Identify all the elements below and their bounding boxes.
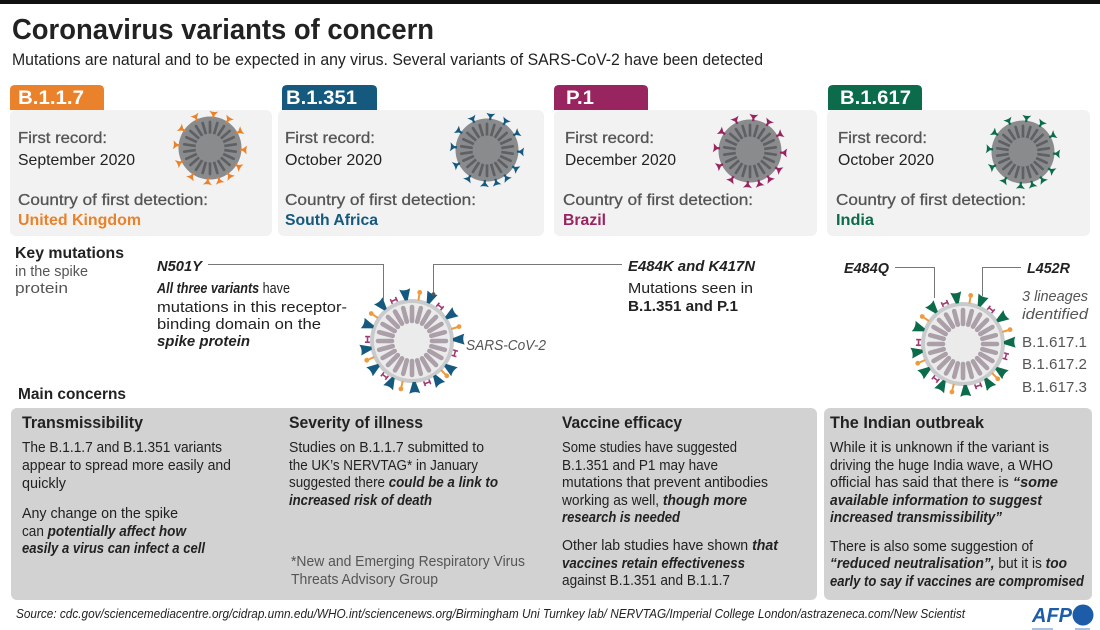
panel: B.1.351: South Africa	[285, 212, 378, 229]
panel: B.1.1.7: United Kingdom	[18, 212, 141, 229]
panel: B.1.351: October 2020	[285, 152, 382, 169]
panel: B.1.617: Country of first detection:	[836, 192, 1026, 209]
panel: P.1: P.1	[566, 88, 594, 109]
text block: transmissibility: Any change on the spike	[22, 505, 178, 522]
callout: E484K and K417N: Mutations seen in	[628, 280, 753, 297]
callout: N501Y: spike protein	[157, 333, 250, 350]
panel: B.1.617	[827, 85, 1090, 236]
AFP logo	[1031, 604, 1094, 630]
panel: B.1.1.7: B.1.1.7	[18, 88, 84, 109]
panel: main concerns background	[11, 408, 817, 600]
panel: B.1.1.7: Country of first detection:	[18, 192, 208, 209]
callout: E484K and K417N	[628, 258, 756, 315]
text block: vaccine efficacy	[561, 414, 779, 589]
panel: B.1.1.7: September 2020	[18, 152, 135, 169]
panel: B.1.351	[278, 85, 544, 236]
text block: vaccine efficacy: mutations that prevent antibodies	[562, 474, 768, 491]
panel: the Indian outbreak: increased transmissibility”	[830, 509, 1002, 526]
text block: transmissibility	[22, 414, 231, 557]
text block: severity of illness: increased risk of death	[289, 492, 432, 509]
callout: N501Y: binding domain on the	[157, 316, 321, 333]
panel: the Indian outbreak: “reduced neutralisation”, but it is too	[830, 555, 1067, 572]
text block: vaccine efficacy: working as well, though more	[561, 492, 747, 509]
text block: vaccine efficacy: research is needed	[562, 509, 681, 526]
panel: B.1.617: B.1.617	[840, 88, 911, 109]
panel: B.1.617: First record:	[838, 130, 927, 147]
text block: transmissibility: quickly	[22, 475, 66, 492]
India virus diagram with E484Q and L452R: L452R	[1027, 260, 1070, 277]
panel: B.1.351: B.1.351	[286, 88, 357, 109]
text block: vaccine efficacy: Some studies have suggested	[562, 439, 737, 456]
panel: B.1.1.7	[10, 85, 272, 236]
callout: N501Y: mutations in this receptor-	[157, 299, 347, 316]
panel: the Indian outbreak: There is also some suggestion of	[830, 538, 1034, 555]
key mutations heading: Key mutations	[15, 245, 124, 262]
text block: transmissibility: easily a virus can infect a cell	[22, 540, 206, 557]
panel: P.1: Country of first detection:	[563, 192, 753, 209]
panel: B.1.617: October 2020	[838, 152, 934, 169]
text block: vaccine efficacy: vaccines retain effectiveness	[562, 555, 745, 572]
text block: severity of illness	[289, 414, 525, 588]
subtitle: Mutations are natural and to be expected in any virus. Several variants of SARS-CoV-2 have been detected	[12, 50, 763, 69]
icon: green virus	[986, 115, 1060, 189]
top black bar	[0, 0, 1100, 4]
text block: transmissibility: appear to spread more easily and	[22, 457, 231, 474]
AFP logo: AFP	[1031, 605, 1073, 627]
lineages list: B.1.617.1	[1022, 334, 1087, 351]
icon: purple virus	[713, 114, 787, 188]
panel: B.1.351: First record:	[285, 130, 375, 147]
India virus diagram with E484Q and L452R: E484Q	[844, 260, 889, 277]
text block: vaccine efficacy: Vaccine efficacy	[562, 414, 683, 432]
text block: vaccine efficacy: against B.1.351 and B.1.1.7	[562, 572, 730, 589]
icon: orange virus	[173, 111, 247, 185]
icon: blue virus	[450, 113, 524, 187]
callout: N501Y	[156, 258, 347, 350]
title: Coronavirus variants of concern	[12, 14, 434, 46]
panel: B.1.1.7: First record:	[18, 130, 107, 147]
key mutations heading	[15, 245, 124, 297]
panel: P.1: December 2020	[565, 152, 676, 169]
panel: the Indian outbreak: available information to suggest	[830, 492, 1043, 509]
text block: severity of illness: Threats Advisory Group	[291, 571, 438, 588]
text block: severity of illness: suggested there could be a link to	[289, 474, 498, 491]
lineages list: B.1.617.2	[1022, 356, 1087, 373]
text block: vaccine efficacy: Other lab studies have shown that	[562, 537, 779, 554]
lineages list	[1022, 288, 1089, 396]
panel: the Indian outbreak: driving the huge India wave, a WHO	[830, 457, 1053, 474]
text block: severity of illness: Severity of illness	[289, 414, 423, 432]
panel: the Indian outbreak	[824, 408, 1092, 600]
callout: E484K and K417N: B.1.351 and P.1	[628, 298, 738, 315]
source line: Source: cdc.gov/sciencemediacentre.org/cidrap.umn.edu/WHO.int/sciencenews.org/Birmingham Uni Turnkey lab/ NERVTAG/Imperial College London/astrazeneca.com/New Scientist	[16, 607, 965, 621]
panel: P.1	[554, 85, 817, 236]
key mutations heading: in the spike	[15, 263, 88, 280]
callout: N501Y: All three variants have	[156, 280, 290, 297]
text block: severity of illness: *New and Emerging Respiratory Virus	[291, 553, 525, 570]
lineages list: identified	[1022, 306, 1089, 323]
panel: the Indian outbreak: While it is unknown if the variant is	[830, 439, 1049, 456]
panel: the Indian outbreak: The Indian outbreak	[830, 414, 985, 432]
central SARS-CoV-2 virus diagram: SARS-CoV-2	[466, 337, 547, 354]
panel: P.1: First record:	[565, 130, 654, 147]
callout: N501Y: N501Y	[157, 258, 204, 275]
callout: E484K and K417N: E484K and K417N	[628, 258, 756, 275]
panel: B.1.617: India	[836, 212, 874, 229]
panel: P.1: Brazil	[563, 212, 606, 229]
India virus diagram with E484Q and L452R	[844, 260, 1070, 405]
lineages list: 3 lineages	[1022, 288, 1088, 305]
panel: the Indian outbreak: official has said that there is “some	[830, 474, 1058, 491]
text block: vaccine efficacy: B.1.351 and P1 may have	[562, 457, 718, 474]
central SARS-CoV-2 virus diagram	[208, 264, 622, 402]
lineages list: B.1.617.3	[1022, 379, 1087, 396]
text block: severity of illness: Studies on B.1.1.7 submitted to	[289, 439, 484, 456]
text block: transmissibility: can potentially affect how	[22, 523, 187, 540]
panel: B.1.351: Country of first detection:	[285, 192, 476, 209]
key mutations heading: protein	[15, 280, 68, 297]
text block: transmissibility: Transmissibility	[22, 414, 144, 432]
text block: severity of illness: the UK’s NERVTAG* in January	[289, 457, 478, 474]
text block: transmissibility: The B.1.1.7 and B.1.351 variants	[22, 439, 222, 456]
heading: main concerns: Main concerns	[18, 386, 126, 403]
